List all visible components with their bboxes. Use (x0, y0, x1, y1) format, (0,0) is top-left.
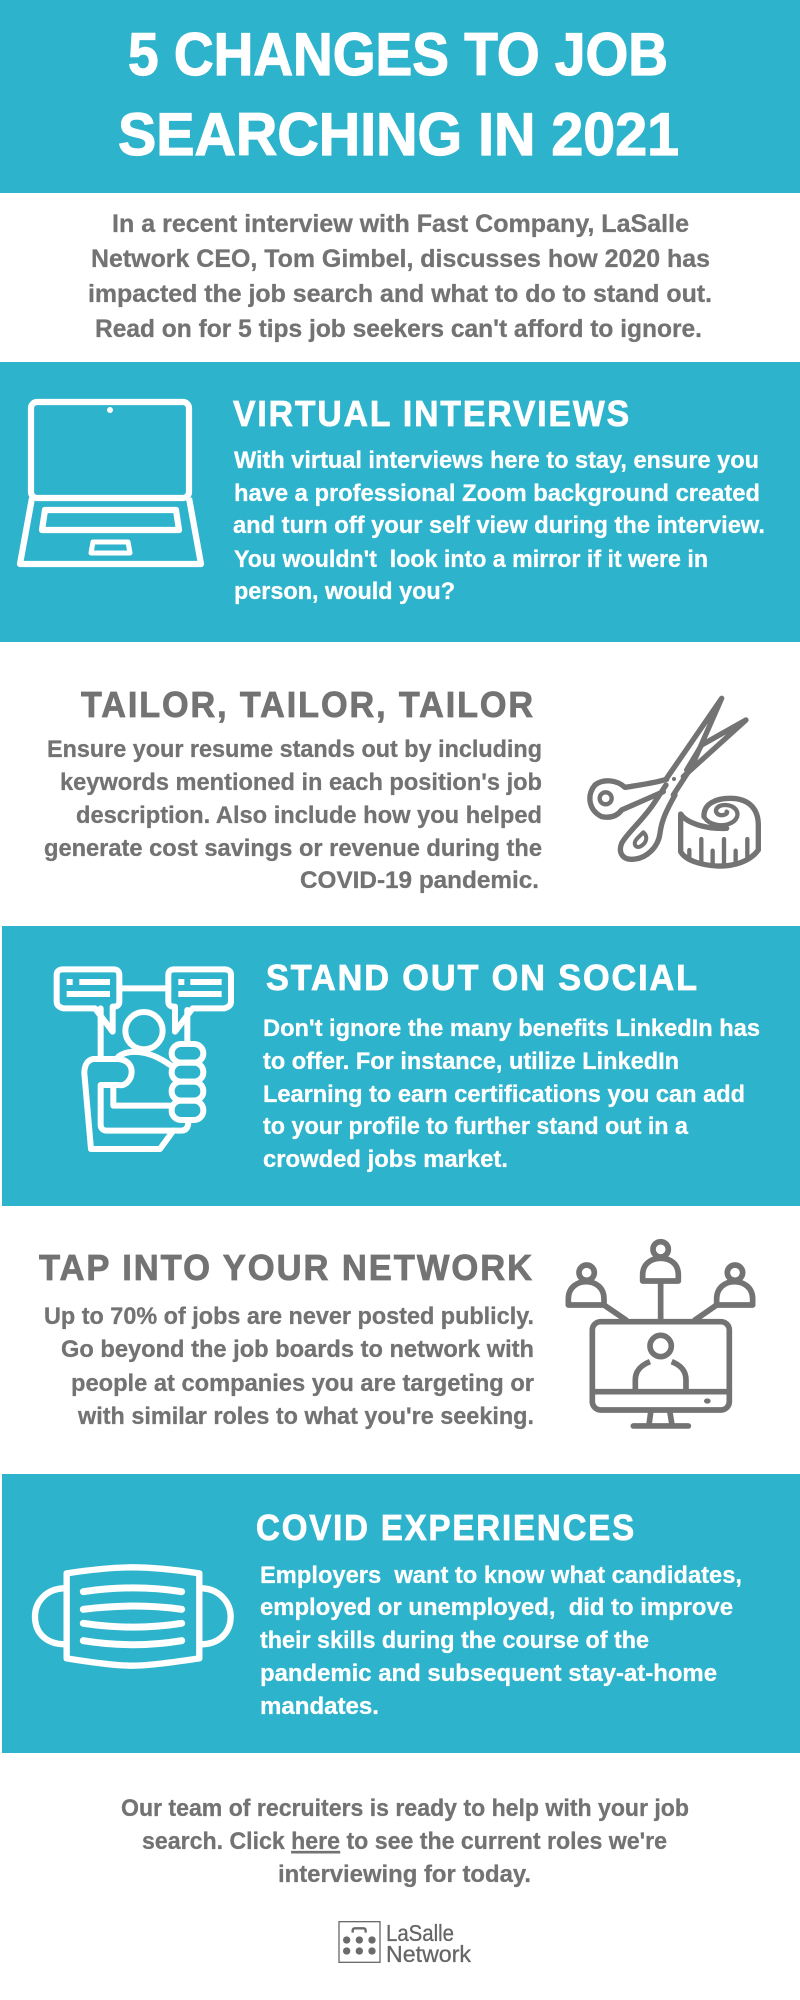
icon: logo mark (339, 1922, 380, 1962)
panel: tailor (44, 684, 758, 894)
text: covid body: Employers want to know what candidates, (260, 1562, 742, 1589)
text: network body: Up to 70% of jobs are never posted publicly. (44, 1303, 534, 1330)
text: network body: with similar roles to what you're seeking. (77, 1403, 534, 1430)
icon: face mask (35, 1567, 231, 1666)
text: virtual interviews body: With virtual interviews here to stay, ensure you (234, 447, 759, 474)
icon: phone with social profile (57, 969, 231, 1149)
text: network body: people at companies you are targeting or (71, 1370, 534, 1397)
intro text: Network CEO, Tom Gimbel, discusses how 2020 has (91, 245, 710, 273)
heading: tap into your network: TAP INTO YOUR NETWORK (39, 1247, 534, 1288)
footer text: interviewing for today. (278, 1861, 531, 1888)
text: virtual interviews body: have a professional Zoom background created (234, 480, 760, 507)
title: 5 CHANGES TO JOB (128, 21, 668, 88)
text: stand out body: Don't ignore the many benefits LinkedIn has (263, 1015, 760, 1042)
text: covid body: employed or unemployed, did to improve (260, 1594, 733, 1621)
text: stand out body: to your profile to further stand out in a (263, 1113, 689, 1140)
text: tailor body: keywords mentioned in each position's job (60, 769, 542, 796)
text: virtual interviews body: person, would you? (234, 578, 455, 605)
text: tailor body: description. Also include how you helped (76, 802, 542, 829)
text: tailor body: generate cost savings or revenue during the (44, 835, 542, 862)
text: covid body: pandemic and subsequent stay-at-home (260, 1660, 717, 1687)
text: virtual interviews body: You wouldn't look into a mirror if it were in (234, 546, 708, 573)
heading: covid experiences: COVID EXPERIENCES (256, 1507, 636, 1548)
logo wordmark (386, 1920, 471, 1967)
text: network body: Go beyond the job boards to network with (61, 1336, 534, 1363)
text: tailor body (44, 736, 542, 894)
footer text (121, 1795, 689, 1888)
intro text: Read on for 5 tips job seekers can't afford to ignore. (95, 315, 702, 343)
footer text: search. Click here to see the current roles we're (142, 1828, 667, 1855)
intro text: In a recent interview with Fast Company, LaSalle (112, 210, 689, 238)
heading: virtual interviews: VIRTUAL INTERVIEWS (233, 393, 631, 434)
title: SEARCHING IN 2021 (118, 101, 679, 168)
panel: title banner (0, 0, 800, 193)
text: covid body: mandates. (260, 1693, 379, 1720)
footer text: Our team of recruiters is ready to help with your job (121, 1795, 689, 1822)
text: tailor body: Ensure your resume stands out by including (47, 736, 542, 763)
heading: tailor: TAILOR, TAILOR, TAILOR (81, 684, 535, 725)
panel: virtual interviews (0, 362, 800, 642)
text: stand out body: to offer. For instance, utilize LinkedIn (263, 1048, 679, 1075)
text: covid body: their skills during the course of the (260, 1627, 649, 1654)
intro text (88, 210, 712, 343)
icon: laptop (20, 402, 201, 564)
text: virtual interviews body (233, 447, 765, 605)
heading: stand out on social: STAND OUT ON SOCIAL (266, 957, 699, 998)
text: tailor body: COVID-19 pandemic. (300, 867, 539, 894)
logo wordmark: Network (386, 1941, 471, 1967)
panel: covid experiences (2, 1474, 800, 1753)
text: stand out body: Learning to earn certifications you can add (263, 1081, 745, 1108)
logo wordmark: LaSalle (386, 1920, 454, 1946)
text: virtual interviews body: and turn off your self view during the interview. (233, 512, 765, 539)
text: stand out body: crowded jobs market. (263, 1146, 508, 1173)
logo: LaSalle Network (339, 1920, 471, 1967)
text: network body (44, 1303, 534, 1430)
icon: scissors and tape measure (590, 698, 758, 866)
intro text: impacted the job search and what to do to stand out. (88, 280, 712, 308)
title (118, 21, 679, 168)
icon: monitor with connected people (568, 1242, 753, 1426)
text: covid body (260, 1562, 742, 1720)
text: stand out body (263, 1015, 760, 1173)
panel: stand out on social (2, 926, 800, 1206)
panel: tap into your network (39, 1242, 753, 1430)
